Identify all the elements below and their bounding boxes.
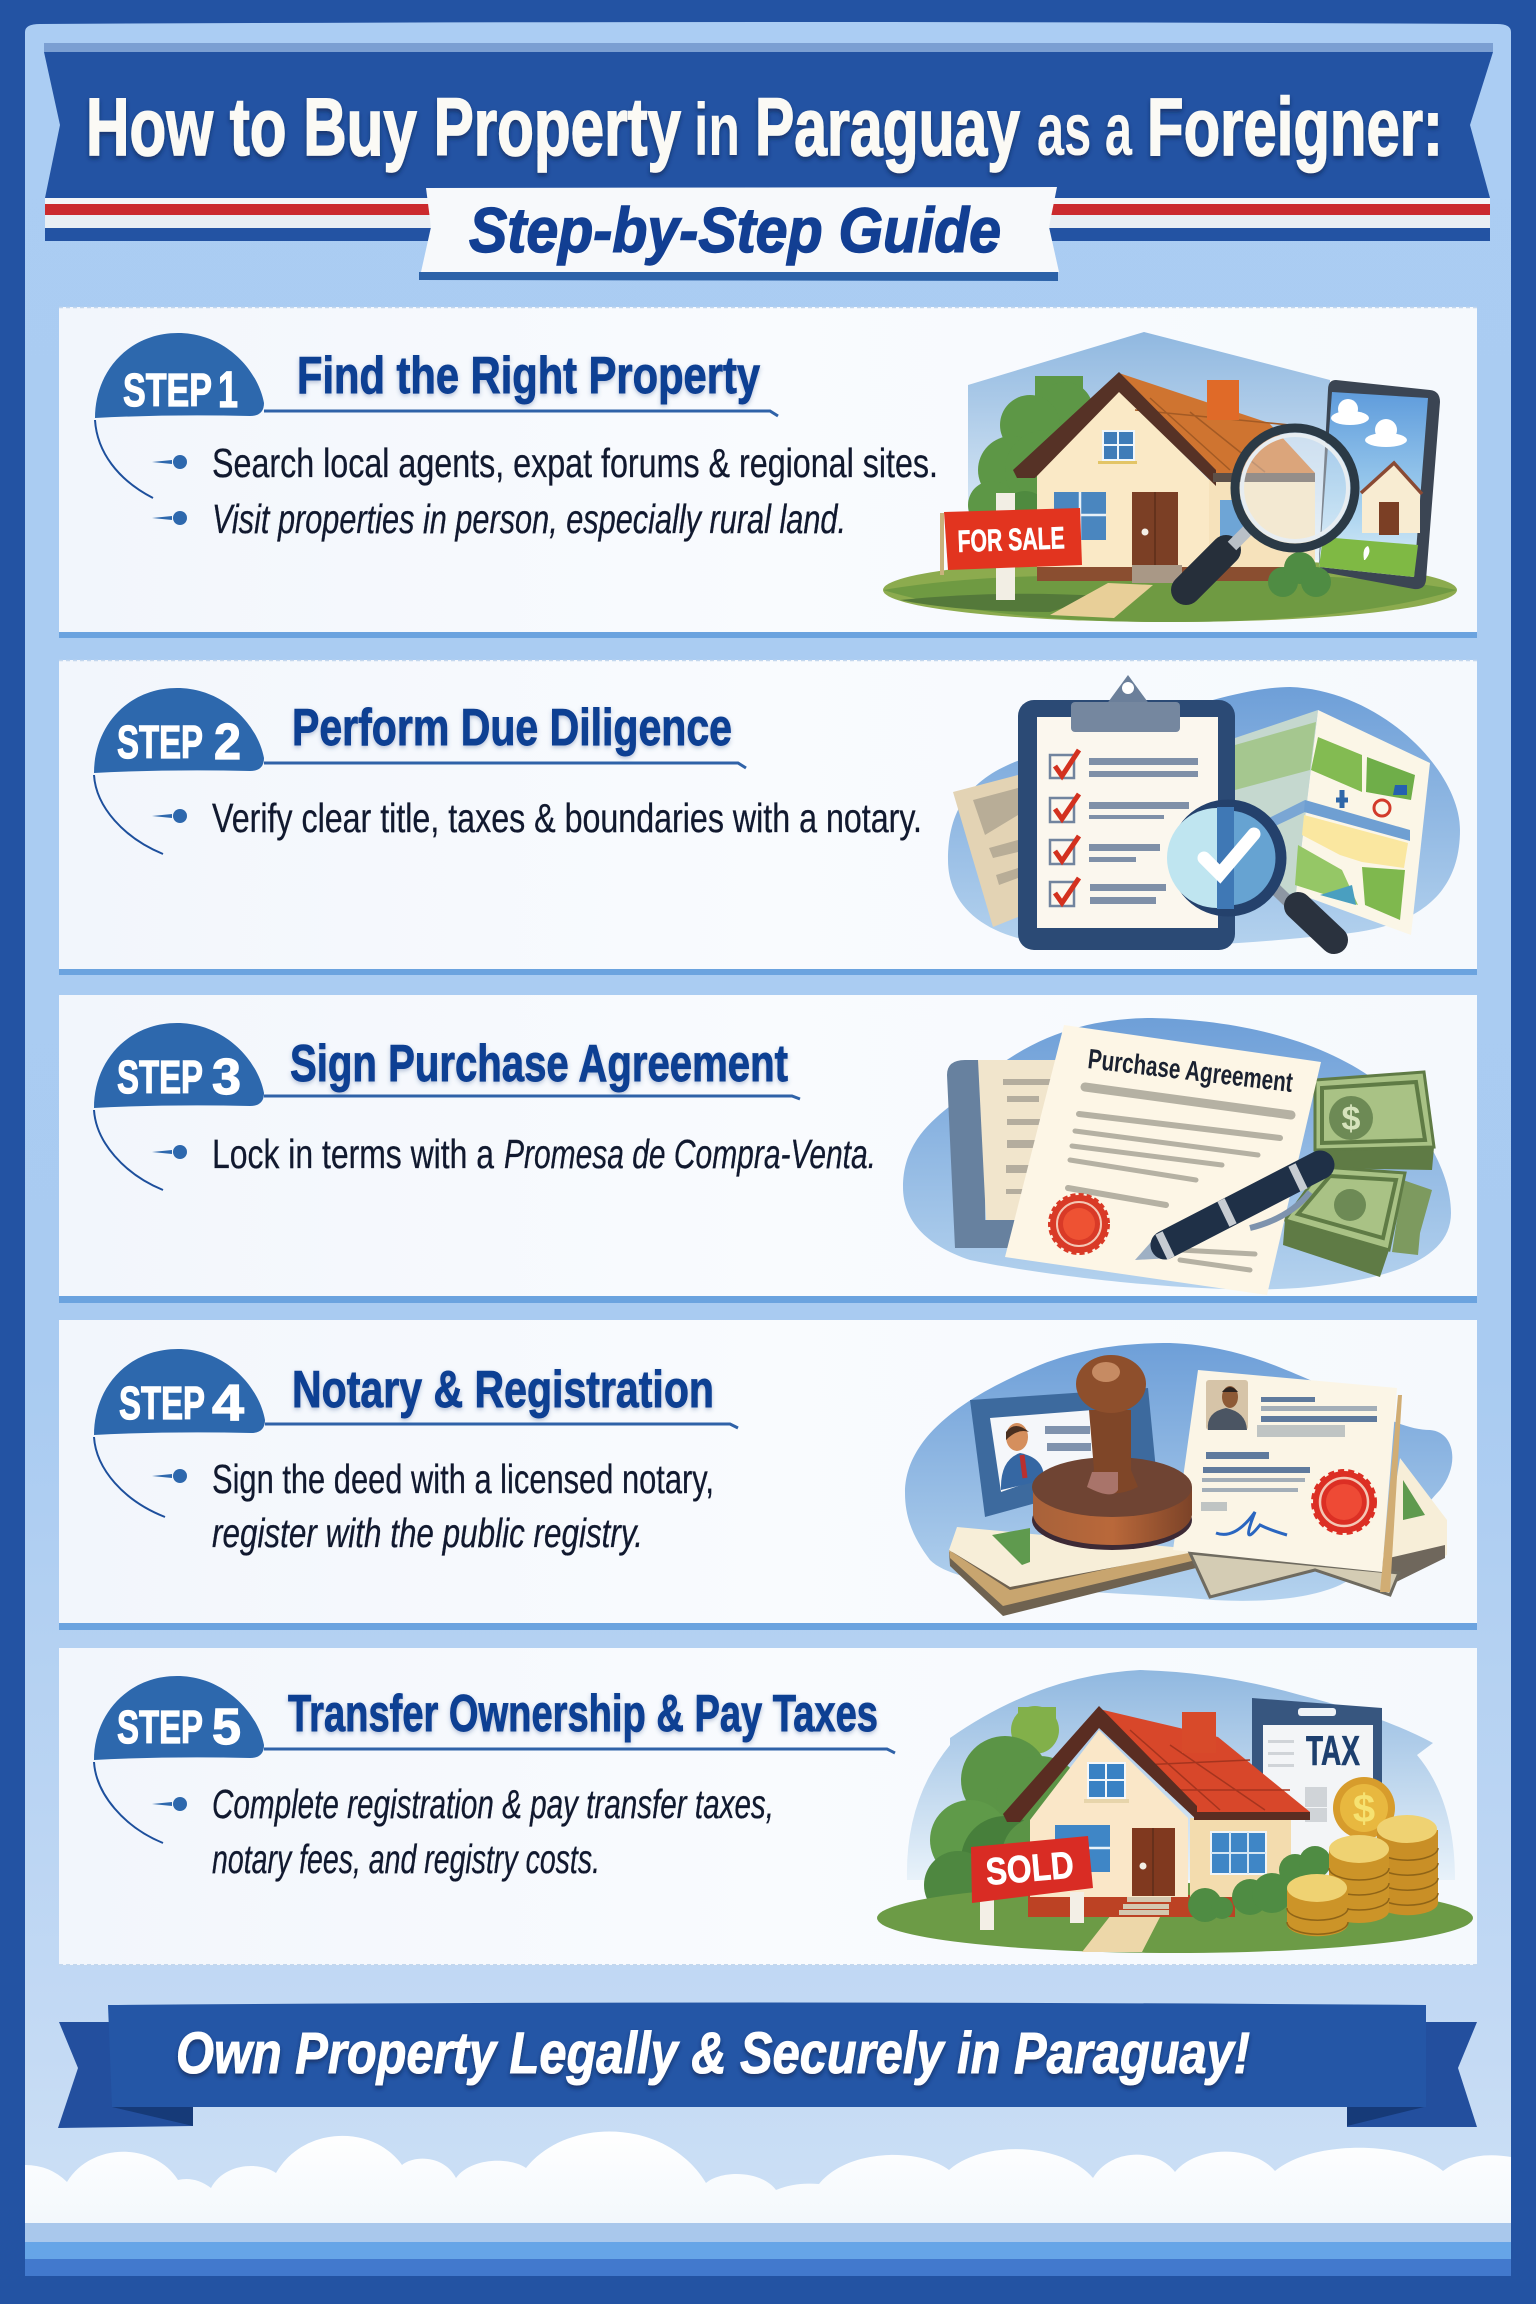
step 2 connector lines — [94, 763, 746, 854]
bushes — [1188, 1846, 1331, 1922]
step 3 connector lines — [94, 1096, 800, 1190]
step 5 connector lines — [94, 1749, 895, 1843]
step 2 badge: 2 — [214, 713, 241, 770]
step 3 bullet — [152, 1131, 876, 1177]
flag stripes — [45, 198, 1490, 241]
coin stacks — [1287, 1815, 1438, 1936]
main title: in — [694, 88, 740, 171]
clipboard — [1018, 675, 1235, 950]
panel: step 2 — [59, 660, 1477, 975]
map — [1235, 710, 1430, 935]
main title — [86, 82, 1443, 173]
step 1 badge: STEP — [123, 364, 212, 416]
step 4 heading: Notary & Registration — [292, 1361, 714, 1419]
subtitle: Step-by-Step Guide — [469, 196, 1001, 266]
main document — [1005, 1025, 1321, 1295]
step 4 bullet — [152, 1456, 714, 1556]
step 4 badge: STEP — [119, 1377, 205, 1429]
step 4 badge — [94, 1349, 265, 1435]
panel: step 4 — [59, 1320, 1477, 1630]
closing message: Own Property Legally & Securely in Paraguay! — [176, 2021, 1250, 2086]
step 5 bullet: Complete registration & pay transfer taxes, — [212, 1781, 774, 1827]
step 1 badge: 1 — [218, 361, 238, 418]
illustration: sold house with tax form and coins — [877, 1670, 1473, 1953]
illustration: purchase agreement with pen and money — [903, 1018, 1451, 1295]
step 3 badge: STEP — [117, 1051, 203, 1103]
step 1 connector lines — [95, 411, 778, 498]
behind pages — [1190, 1395, 1447, 1597]
magnifier with check — [1167, 805, 1334, 940]
money stacks — [1283, 1072, 1434, 1277]
checklist rows — [1050, 755, 1074, 906]
step 4 badge: 4 — [212, 1374, 245, 1431]
step 3 badge — [94, 1023, 264, 1108]
step 1 bullet 2 — [152, 496, 846, 542]
step 2 bullet: Verify clear title, taxes & boundaries with a notary. — [212, 795, 922, 841]
ribbon tails — [58, 2022, 1477, 2128]
step 1 bullet 1: Search local agents, expat forums & regional sites. — [212, 440, 938, 486]
tax form — [1252, 1698, 1382, 1855]
sold sign — [971, 1836, 1093, 1930]
illustration: house for sale with magnifier and phone — [883, 332, 1457, 622]
sold sign: SOLD — [984, 1844, 1075, 1894]
step 5 badge: STEP — [117, 1701, 203, 1753]
tree — [924, 1706, 1084, 1928]
house — [1028, 1895, 1235, 1917]
magnifier — [1186, 428, 1355, 590]
gold coin: $ — [1353, 1787, 1375, 1831]
step 1 badge — [95, 333, 264, 418]
step 4 bullet: Sign the deed with a licensed notary, — [212, 1456, 714, 1502]
title banner — [44, 43, 1493, 241]
panel: step 5 — [59, 1648, 1477, 1965]
illustration: clipboard checklist with map and magnifier — [948, 675, 1460, 950]
subtitle ribbon — [419, 187, 1059, 281]
main document: Purchase Agreement — [1086, 1043, 1295, 1098]
panel: step 3 — [59, 995, 1477, 1303]
wax seal — [1050, 1195, 1108, 1253]
for sale sign: FOR SALE — [957, 520, 1065, 559]
for sale sign — [940, 493, 1082, 600]
step 5 heading: Transfer Ownership & Pay Taxes — [288, 1685, 878, 1743]
step 3 bullet: Lock in terms with a — [212, 1131, 494, 1177]
document book — [949, 1527, 1196, 1616]
wooden stamp — [1032, 1355, 1192, 1550]
step 5 bullet: notary fees, and registry costs. — [212, 1836, 600, 1882]
ID card — [970, 1388, 1156, 1517]
step 5 badge: 5 — [212, 1698, 241, 1755]
panel: step 1 — [59, 307, 1477, 638]
main title: as a — [1037, 88, 1133, 171]
back folder — [947, 1060, 1056, 1248]
step 4 connector lines — [94, 1424, 738, 1517]
house — [1037, 567, 1317, 581]
main title: How to Buy Property — [86, 82, 681, 173]
back document — [953, 775, 1018, 927]
wax seal — [1313, 1471, 1375, 1533]
step 3 badge: 3 — [212, 1048, 241, 1105]
illustration: notary stamp, ID card and certificate — [905, 1343, 1452, 1616]
money stacks: $ — [1342, 1100, 1361, 1138]
step 3 heading: Sign Purchase Agreement — [290, 1035, 788, 1093]
step 2 badge — [94, 688, 264, 773]
gold coin — [1333, 1777, 1395, 1839]
step 4 bullet: register with the public registry. — [212, 1510, 643, 1556]
main title: Paraguay — [755, 82, 1020, 173]
bush — [1268, 552, 1331, 597]
step 1 bullet 2: Visit properties in person, especially rural land. — [212, 496, 846, 542]
step 1 heading: Find the Right Property — [297, 347, 760, 405]
step 2 badge: STEP — [117, 716, 203, 768]
step 5 badge — [94, 1676, 264, 1760]
step 5 bullet — [152, 1781, 774, 1882]
step 3 bullet: Promesa de Compra-Venta. — [504, 1131, 876, 1177]
phone — [1319, 380, 1440, 589]
tax form: TAX — [1306, 1727, 1360, 1774]
tree — [968, 376, 1093, 539]
pen — [1135, 1165, 1320, 1260]
step 2 heading: Perform Due Diligence — [292, 699, 732, 757]
closing ribbon banner — [58, 2002, 1477, 2128]
bottom stripes — [25, 2223, 1511, 2276]
clouds — [25, 2131, 1511, 2223]
certificate — [1173, 1370, 1397, 1572]
